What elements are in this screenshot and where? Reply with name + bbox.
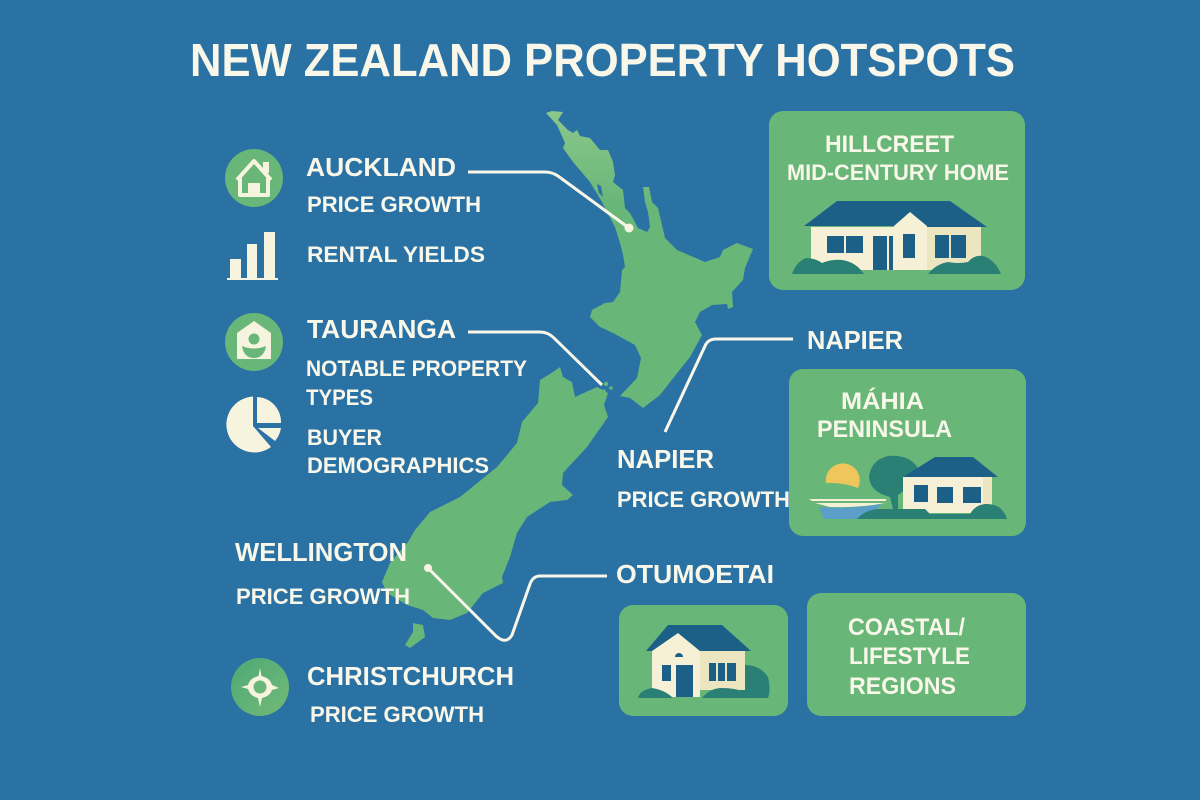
- South Island: [382, 367, 608, 620]
- text: coastal: COASTAL/: [848, 614, 965, 641]
- panel: Mahia Peninsula: [789, 369, 1026, 536]
- label: Christchurch: CHRISTCHURCH: [307, 661, 514, 691]
- icon: bar chart: [227, 232, 278, 280]
- label: Napier price growth: PRICE GROWTH: [617, 487, 790, 512]
- panel: Hillcreet: [769, 111, 1025, 290]
- text: regions: REGIONS: [849, 673, 956, 700]
- label: Auckland price growth: PRICE GROWTH: [307, 192, 481, 217]
- panel: coastal lifestyle regions: [807, 593, 1026, 716]
- panel: Otumoetai house: [619, 605, 788, 716]
- label: Wellington: WELLINGTON: [235, 537, 407, 567]
- illustration: coastal house: [809, 456, 1007, 519]
- Stewart Island: [405, 623, 425, 648]
- label: Napier connector: NAPIER: [807, 325, 903, 355]
- illustration: mid-century house: [792, 201, 1001, 274]
- connector: Tauranga: [468, 332, 602, 385]
- label: buyer demographics: [307, 425, 489, 478]
- label: notable property types: [306, 356, 527, 410]
- heading: Peninsula: PENINSULA: [817, 416, 952, 443]
- Marlborough Sounds islets: [602, 382, 613, 393]
- label: buyer demographics: DEMOGRAPHICS: [307, 453, 489, 478]
- icon: house: [225, 149, 283, 207]
- label: Christchurch price growth: PRICE GROWTH: [310, 702, 484, 727]
- label: Auckland: AUCKLAND: [306, 152, 456, 182]
- map of New Zealand: [382, 111, 753, 648]
- icon: pie chart: [226, 396, 281, 452]
- heading: Mahia: MÁHIA: [841, 387, 924, 415]
- icon: house with person: [225, 313, 283, 371]
- Kaipara harbour: [597, 184, 603, 197]
- heading: Hillcreet: HILLCREET: [825, 131, 954, 158]
- North Island: [546, 111, 753, 408]
- title: NEW ZEALAND PROPERTY HOTSPOTS: [190, 34, 1015, 86]
- label: Tauranga: TAURANGA: [307, 314, 456, 344]
- illustration: house: [638, 625, 770, 698]
- icon: compass: [231, 658, 289, 716]
- label: Napier: NAPIER: [617, 444, 714, 474]
- label: notable property types: NOTABLE PROPERTY: [306, 356, 527, 381]
- heading: mid-century home: MID-CENTURY HOME: [787, 160, 1009, 185]
- label: rental yields: RENTAL YIELDS: [307, 242, 485, 267]
- text: lifestyle: LIFESTYLE: [849, 643, 970, 670]
- connector: Auckland: [468, 172, 634, 232]
- label: buyer demographics: BUYER: [307, 425, 382, 450]
- label: notable property types: TYPES: [306, 385, 373, 410]
- connector: Otumoetai: [424, 564, 607, 640]
- connector: Napier: [665, 339, 793, 432]
- label: Otumoetai: OTUMOETAI: [616, 559, 774, 589]
- label: Wellington price growth: PRICE GROWTH: [236, 584, 410, 609]
